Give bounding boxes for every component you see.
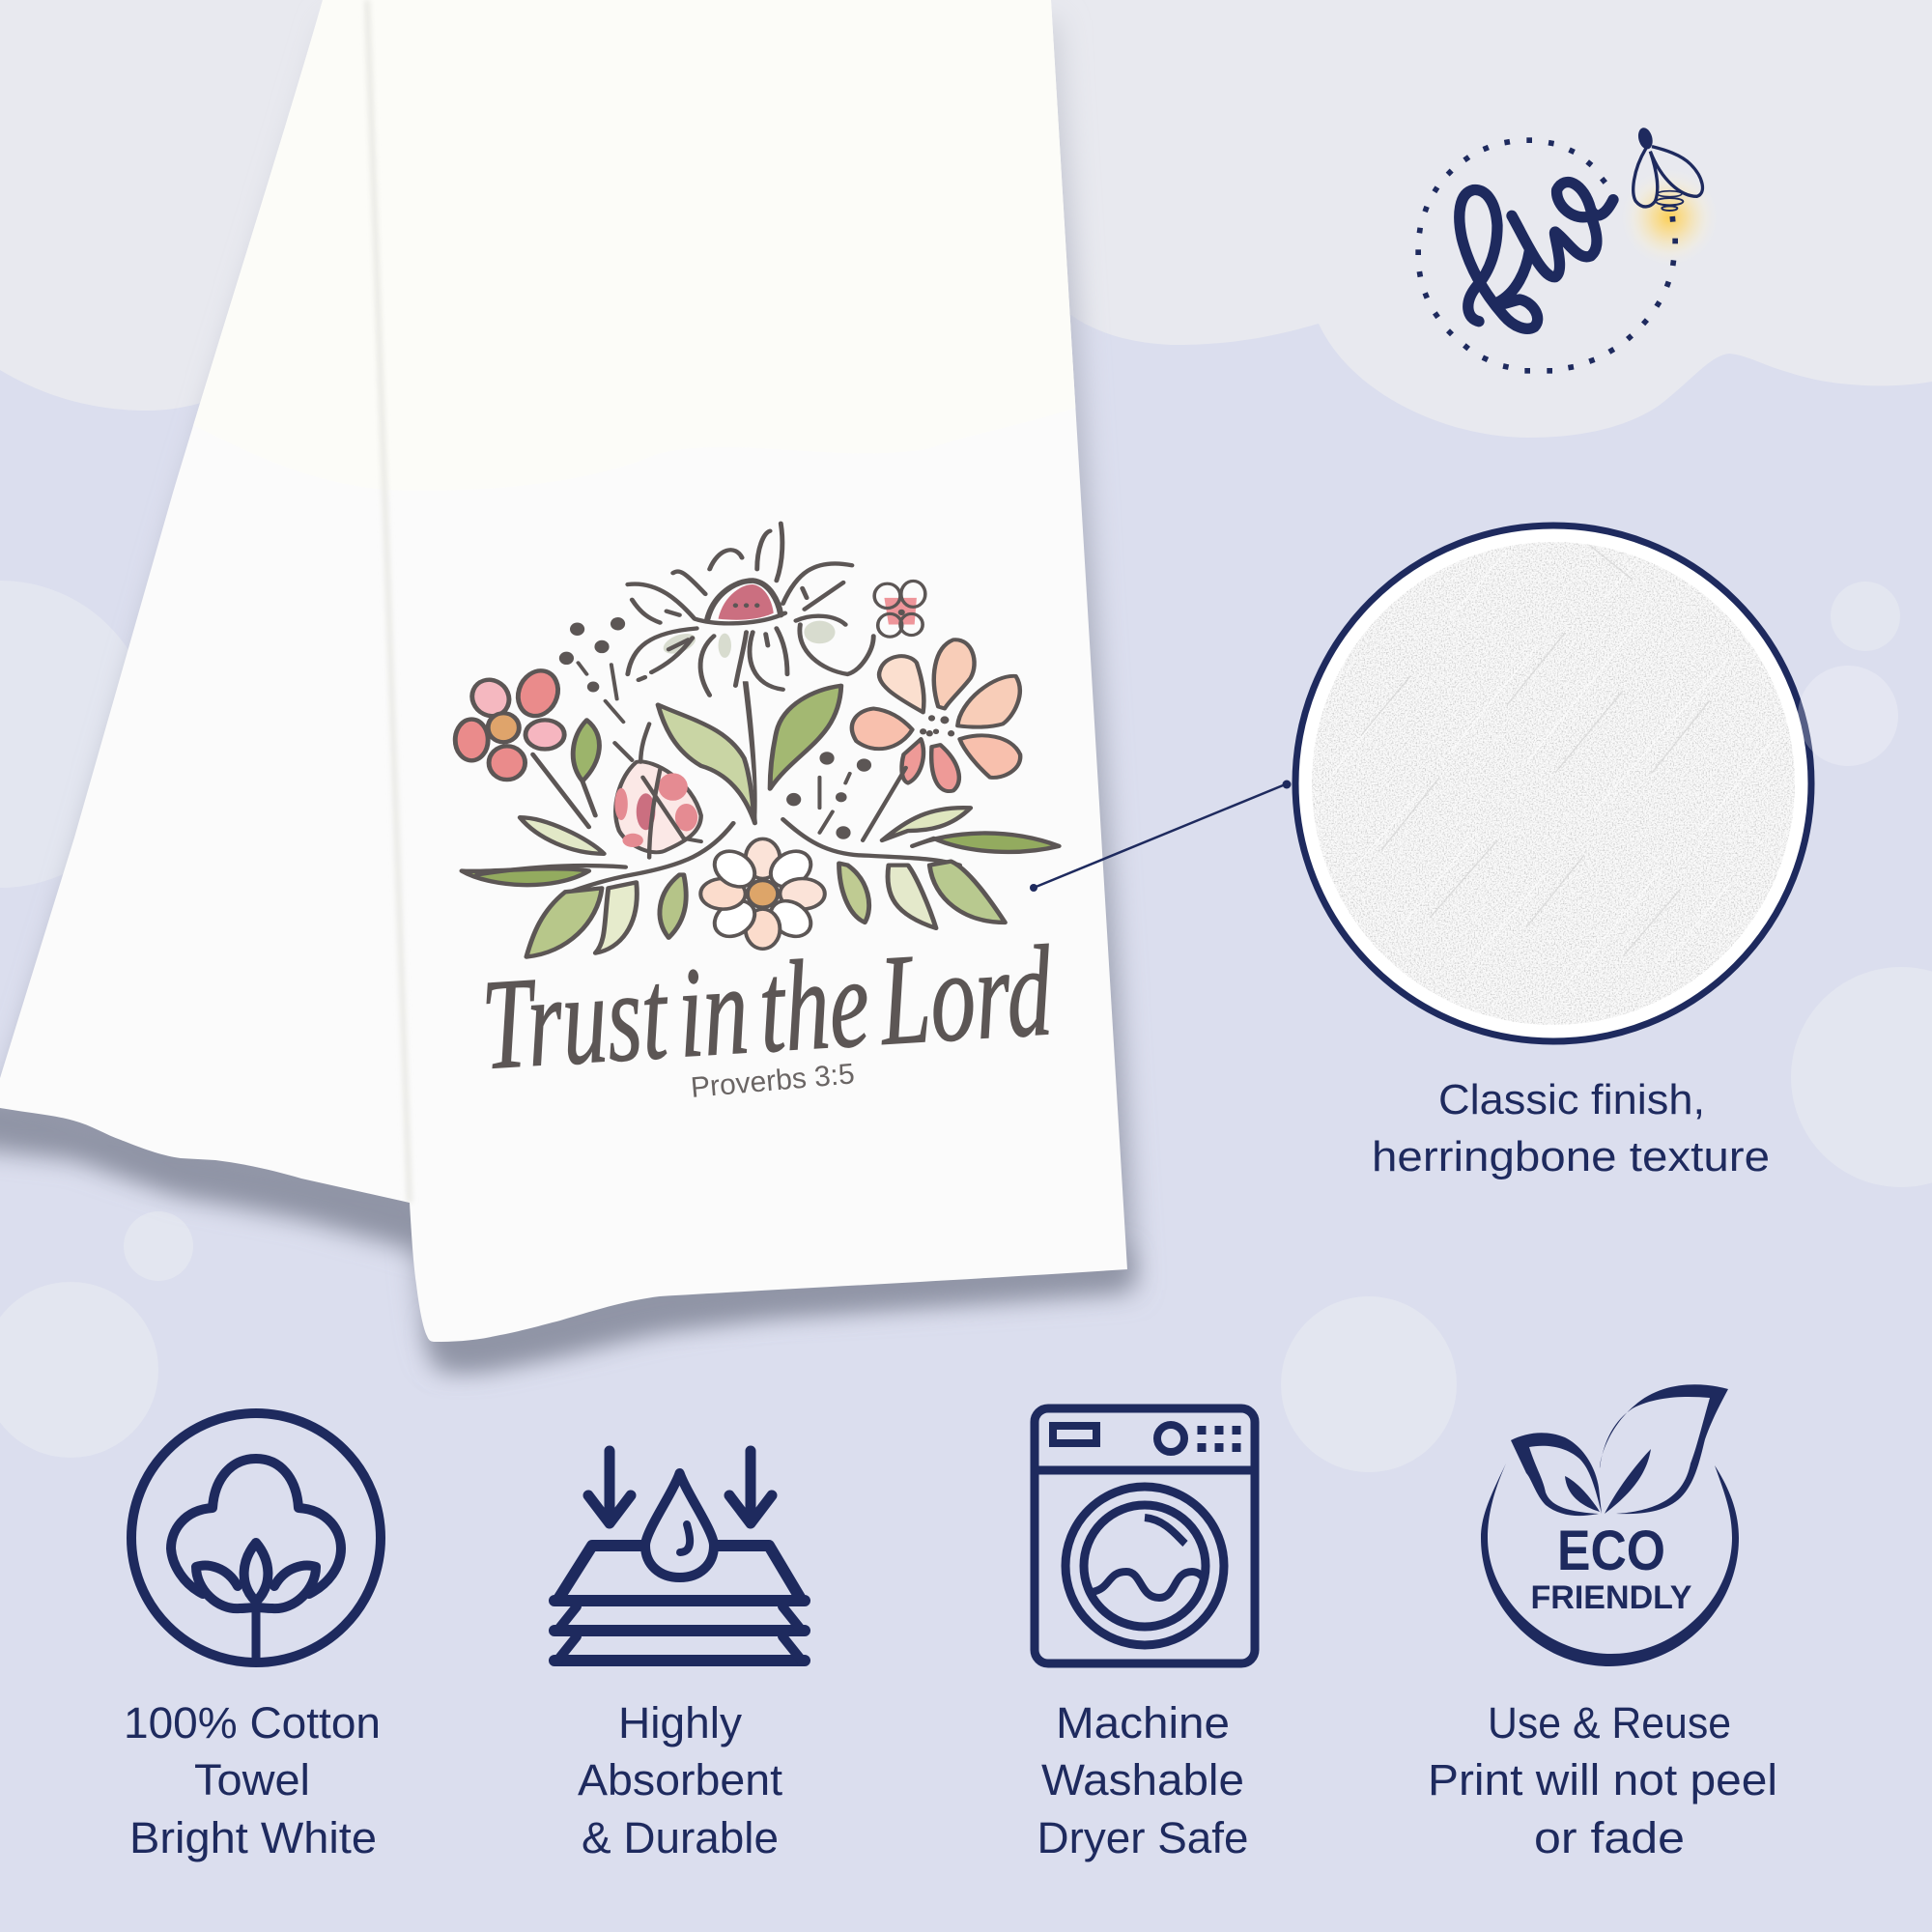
label: cotton: Bright White [129, 1813, 377, 1862]
top flower [628, 524, 873, 823]
towel [0, 0, 1159, 1352]
logo firefly [1634, 127, 1702, 211]
icon: eco friendly badge [1481, 1384, 1739, 1666]
label: absorbent: Absorbent [578, 1755, 783, 1804]
swatch caption [1372, 1076, 1770, 1180]
towel lettering: Trust in the Lord [478, 919, 1056, 1096]
daisy [700, 838, 825, 949]
icon: washing machine [1035, 1408, 1255, 1663]
label: reuse: Use & Reuse [1488, 1698, 1731, 1747]
towel floral print [455, 524, 1059, 957]
dots left [559, 617, 625, 722]
overlapping translucent bubble [1798, 666, 1898, 766]
leader line [1030, 781, 1291, 892]
label: absorbent: & Durable [582, 1813, 779, 1862]
label: washable: Dryer Safe [1037, 1813, 1248, 1862]
right branch and leaves [783, 808, 1059, 928]
icon: eco friendly badge: FRIENDLY [1530, 1579, 1692, 1616]
towel shadow [0, 20, 1134, 1370]
label: absorbent [578, 1698, 783, 1862]
logo glow [1621, 169, 1718, 266]
swatch caption: herringbone texture [1372, 1133, 1770, 1180]
dots right [786, 752, 871, 839]
label: cotton: 100% Cotton [124, 1698, 381, 1747]
logo dotted ring [1415, 137, 1678, 374]
icon: absorbent layers [554, 1451, 805, 1661]
logo [1415, 127, 1718, 374]
label: reuse [1428, 1698, 1777, 1862]
label: cotton [124, 1698, 381, 1862]
left branch and leaves [462, 817, 733, 957]
center leaves [658, 686, 841, 823]
towel verse: Proverbs 3:5 [690, 1058, 856, 1104]
label: washable [1037, 1698, 1248, 1862]
label: absorbent: Highly [618, 1698, 743, 1747]
label: reuse: Print will not peel [1428, 1755, 1777, 1804]
icon: eco friendly badge: ECO [1557, 1520, 1665, 1582]
logo script mark [1460, 183, 1613, 328]
swatch caption: Classic finish, [1438, 1076, 1705, 1123]
icon: cotton [131, 1413, 381, 1662]
label: washable: Machine [1056, 1698, 1230, 1747]
left flower [455, 667, 599, 827]
fabric swatch circle [1295, 526, 1811, 1041]
ladybug [614, 724, 701, 858]
right large flower [852, 639, 1020, 840]
label: cotton: Towel [194, 1755, 310, 1804]
label: washable: Washable [1041, 1755, 1244, 1804]
label: reuse: or fade [1534, 1813, 1685, 1862]
small flower [874, 581, 925, 637]
